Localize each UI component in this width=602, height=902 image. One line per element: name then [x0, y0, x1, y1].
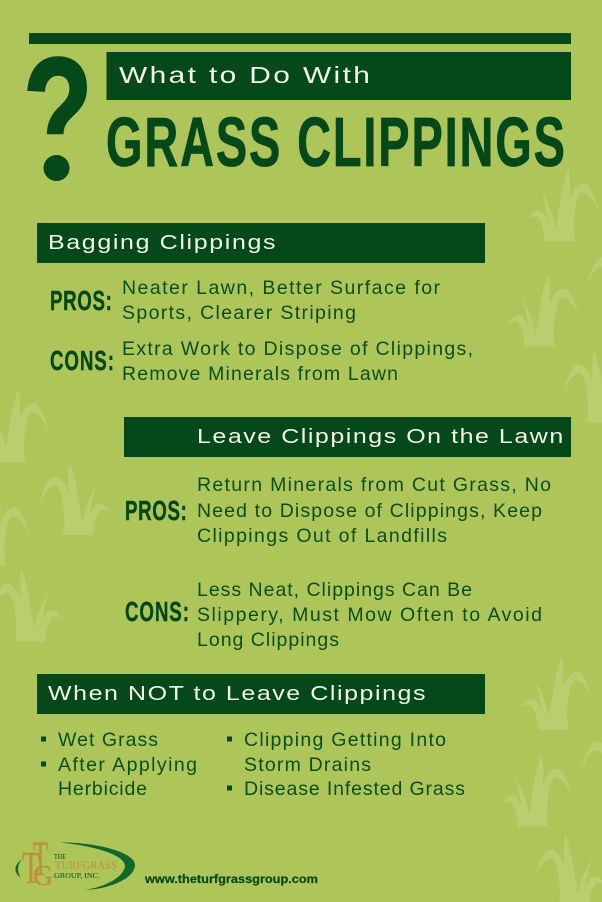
heading: bagging clippings — [37, 223, 485, 263]
bagging cons text: Remove Minerals from Lawn — [122, 363, 398, 385]
heading: when not to leave clippings — [37, 674, 485, 714]
bagging pros text: Neater Lawn, Better Surface for — [122, 277, 440, 299]
leave cons text: Less Neat, Clippings Can Be — [197, 579, 472, 601]
list: right column: Storm Drains — [244, 754, 371, 776]
bagging pros label: PROS: — [50, 285, 112, 316]
leave cons text: Long Clippings — [197, 629, 339, 651]
leave cons label: CONS: — [125, 596, 189, 627]
heading: leave clippings on the lawn: Leave Clippings On the Lawn — [197, 425, 563, 447]
leave cons text — [197, 579, 542, 651]
logo: the turfgrass group — [16, 830, 135, 893]
logo wordmark: TURFGRASS — [55, 860, 117, 872]
panel: when not to leave clippings — [37, 674, 485, 800]
title banner: What to Do With — [119, 62, 370, 88]
leave pros text: Clippings Out of Landfills — [197, 525, 447, 547]
logo swoosh — [60, 842, 135, 890]
heading: bagging clippings: Bagging Clippings — [48, 231, 276, 253]
list: right column — [227, 729, 465, 800]
leave pros text — [197, 474, 551, 547]
leave pros text: Need to Dispose of Clippings, Keep — [197, 500, 542, 522]
logo wordmark: GROUP, INC. — [54, 871, 100, 880]
heading: when not to leave clippings: When NOT to Leave Clippings — [48, 682, 426, 704]
leave pros label: PROS: — [125, 495, 187, 526]
top bar — [29, 33, 571, 44]
bagging pros text — [122, 277, 440, 324]
logo monogram: T — [22, 843, 40, 893]
question mark: ? — [23, 25, 93, 198]
list: left column: Wet Grass — [58, 729, 158, 751]
panel: bagging clippings — [37, 223, 485, 385]
title banner — [106, 52, 571, 100]
logo wordmark — [54, 853, 117, 880]
website url: www.theturfgrassgroup.com — [144, 872, 318, 886]
logo monogram: T — [33, 830, 48, 886]
list: left column — [41, 729, 197, 800]
bagging cons label: CONS: — [50, 345, 114, 376]
logo wordmark: THE — [54, 853, 66, 861]
logo monogram: G — [33, 860, 53, 892]
bagging cons text: Extra Work to Dispose of Clippings, — [122, 338, 473, 360]
logo left arc — [16, 860, 21, 877]
list: left column: After Applying — [58, 754, 197, 776]
list: left column: Herbicide — [58, 778, 147, 800]
title: GRASS CLIPPINGS — [106, 103, 565, 181]
heading: leave clippings on the lawn — [124, 417, 571, 457]
bagging pros text: Sports, Clearer Striping — [122, 302, 356, 324]
leave pros text: Return Minerals from Cut Grass, No — [197, 474, 551, 496]
list: right column: Clipping Getting Into — [244, 729, 446, 751]
leave cons text: Slippery, Must Mow Often to Avoid — [197, 604, 542, 626]
panel: leave clippings on the lawn — [124, 417, 571, 651]
question mark — [27, 56, 87, 181]
bagging cons text — [122, 338, 473, 385]
list: right column: Disease Infested Grass — [244, 778, 465, 800]
